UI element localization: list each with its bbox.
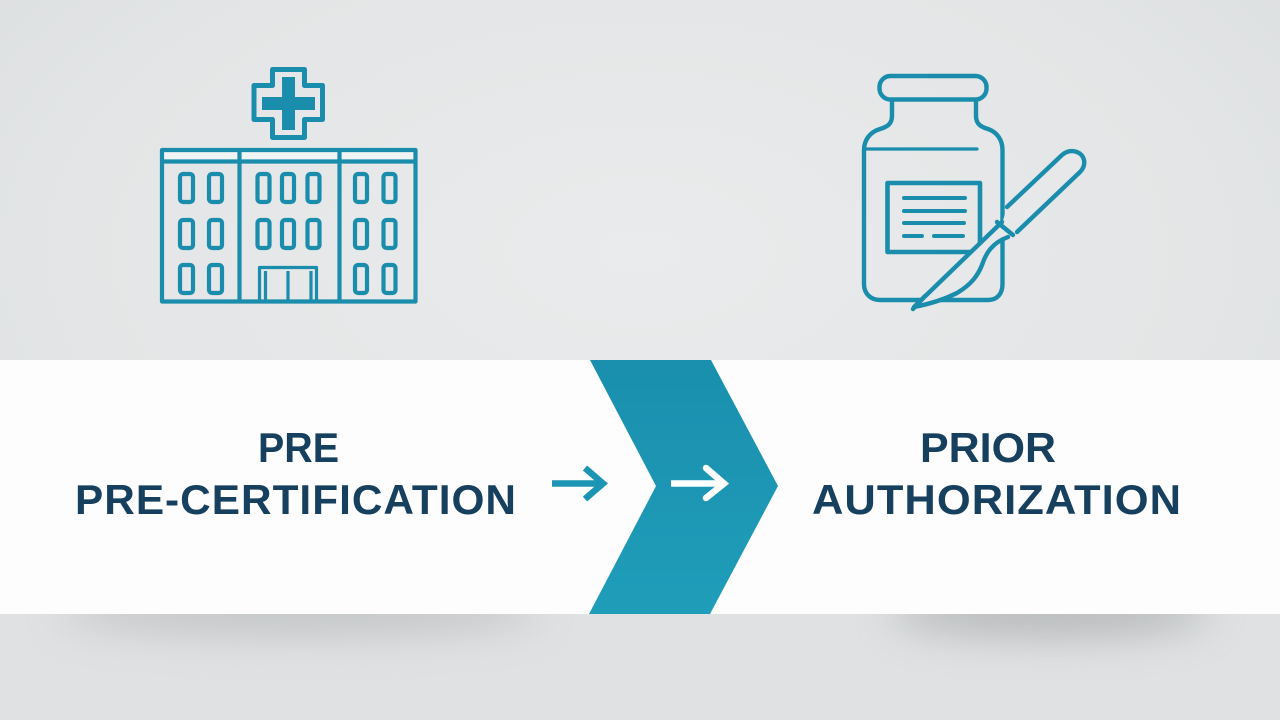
building windows [180, 174, 396, 293]
left label: pre-certification: PRE [258, 424, 339, 471]
bottle shoulder line [866, 147, 977, 151]
white banner [0, 360, 1280, 614]
bottle label [888, 183, 980, 252]
arrow: white [671, 468, 724, 498]
right label: prior authorization: PRIOR [920, 424, 1056, 471]
building entrance door [260, 268, 316, 301]
arrow: teal [552, 468, 603, 499]
right label: prior authorization [812, 424, 1182, 523]
icon: medicine bottle with scalpel [864, 76, 1084, 309]
icon: hospital [162, 70, 416, 302]
scalpel [913, 151, 1084, 309]
icon: medical cross sign [254, 70, 322, 138]
bottle lid [880, 76, 986, 100]
teal chevron [589, 360, 778, 614]
left label: pre-certification [75, 424, 517, 523]
building outline [162, 150, 416, 302]
lower shadow area [82, 614, 1205, 652]
bottle body [864, 100, 1002, 300]
left label: pre-certification: PRE-CERTIFICATION [75, 476, 517, 523]
right label: prior authorization: AUTHORIZATION [812, 476, 1182, 523]
